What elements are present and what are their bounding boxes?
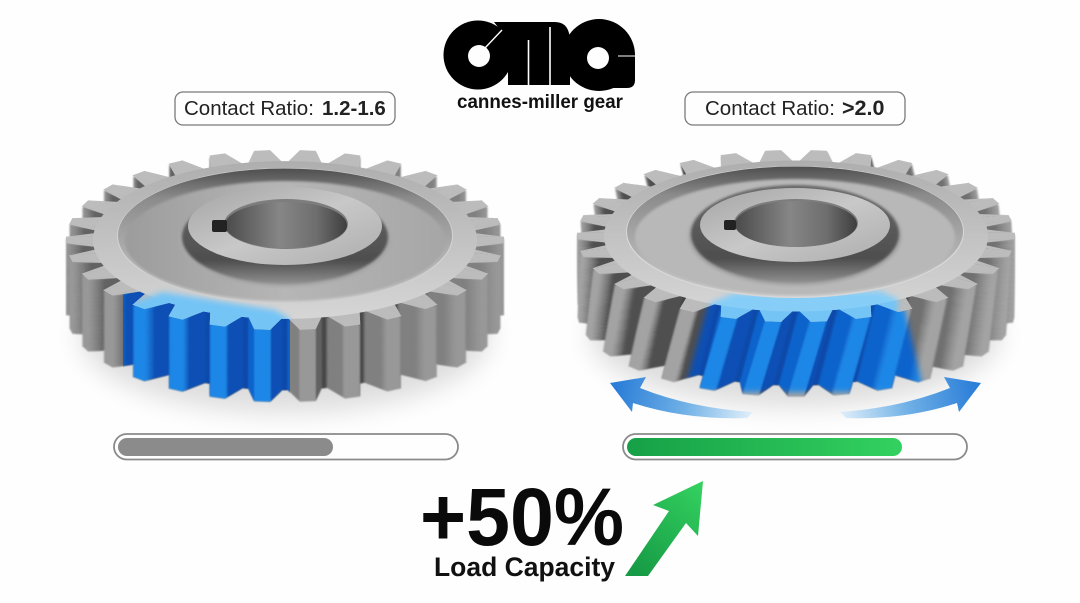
helical gear blue contact teeth bbox=[684, 304, 926, 396]
logo: cannes-miller gear bbox=[444, 19, 637, 113]
progress bar: spur gear bbox=[114, 434, 458, 460]
label: left contact ratio: 1.2-1.6 bbox=[322, 97, 386, 120]
logo mark: oma bbox=[444, 19, 637, 91]
label: right contact ratio bbox=[685, 92, 905, 125]
subheading: load capacity: Load Capacity bbox=[434, 552, 615, 582]
arrow: upward green bbox=[625, 481, 703, 576]
spur gear bore and keyway bbox=[212, 199, 348, 249]
gear: spur gear with highlighted teeth bbox=[66, 150, 504, 413]
arrow: load spread right bbox=[840, 377, 981, 418]
spur gear walls bbox=[66, 152, 504, 402]
gear: helical gear with highlighted teeth bbox=[555, 150, 1037, 407]
label: left contact ratio: Contact Ratio: bbox=[184, 97, 314, 120]
spur gear highlighted top face bbox=[132, 288, 292, 330]
label: right contact ratio: >2.0 bbox=[842, 96, 884, 120]
helical gear highlighted top face bbox=[706, 288, 902, 322]
spur gear blue contact teeth bbox=[123, 290, 290, 403]
helical gear top face bbox=[577, 150, 1015, 322]
label: right contact ratio: Contact Ratio: bbox=[705, 97, 835, 120]
label: left contact ratio bbox=[175, 92, 395, 125]
helical gear walls bbox=[555, 151, 1037, 406]
helical gear hub bbox=[700, 188, 890, 262]
spur gear hub bbox=[188, 187, 382, 265]
spur gear top face bbox=[66, 150, 504, 330]
progress bar: helical gear bbox=[623, 434, 967, 460]
arrow: load spread left bbox=[610, 377, 753, 418]
logo wordmark: cannes-miller gear bbox=[457, 92, 624, 113]
headline: +50%: +50% bbox=[420, 472, 624, 563]
helical gear bore and keyway bbox=[724, 199, 858, 247]
